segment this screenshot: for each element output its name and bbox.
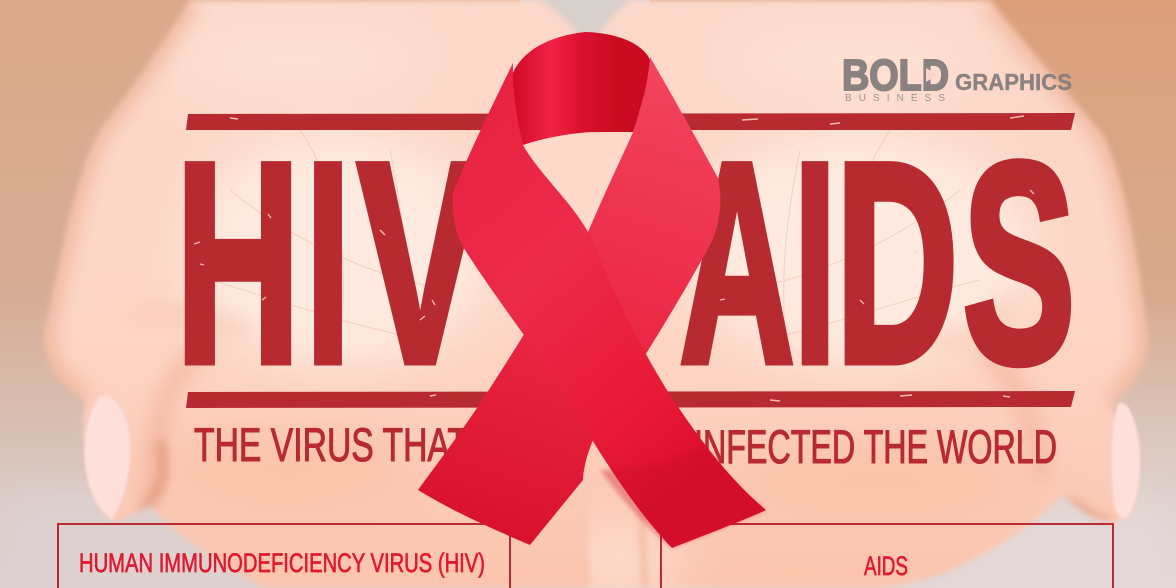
fingernail left — [85, 395, 130, 520]
logo: Bold Business Graphics: BOLD — [842, 51, 949, 100]
worn print specks — [194, 116, 1034, 401]
awareness ribbon — [418, 32, 766, 548]
heading: Human Immunodeficiency Virus: HUMAN IMMUNODEFICIENCY VIRUS (HIV) — [79, 548, 485, 578]
heading: AIDS: AIDS — [864, 551, 908, 581]
title: HIV: V — [358, 105, 483, 422]
subtitle left: THE VIRUS THAT — [194, 418, 468, 471]
logo: Bold Business Graphics — [842, 51, 1072, 104]
logo: Bold Business Graphics: BUSINESS — [845, 93, 945, 104]
title: AIDS: D — [836, 105, 958, 422]
bottom rule — [186, 391, 1075, 408]
title: AIDS: I — [794, 105, 836, 422]
ribbon: back loop — [512, 32, 651, 145]
logo play triangle — [926, 68, 938, 82]
title: HIV: H — [176, 105, 300, 422]
ribbon: left strand and lower-right tail — [453, 63, 766, 548]
title: HIV: I — [306, 105, 350, 422]
ribbon: right strand and lower-left tail — [418, 57, 720, 545]
top rule — [186, 113, 1075, 130]
left hand — [0, 0, 600, 588]
title: AIDS: A — [680, 105, 794, 422]
palm lines — [210, 130, 980, 340]
ribbon: inner hole — [523, 132, 633, 232]
right hand — [560, 0, 1176, 588]
panel: AIDS heading box — [661, 524, 1113, 588]
ribbon: tail shading — [600, 445, 766, 548]
title: HIV — [176, 105, 483, 422]
panel: HIV heading box — [58, 524, 510, 588]
logo: Bold Business Graphics: GRAPHICS — [955, 69, 1072, 95]
fingernail right — [1111, 403, 1140, 519]
title: AIDS: S — [963, 105, 1075, 422]
title: AIDS — [680, 105, 1075, 422]
